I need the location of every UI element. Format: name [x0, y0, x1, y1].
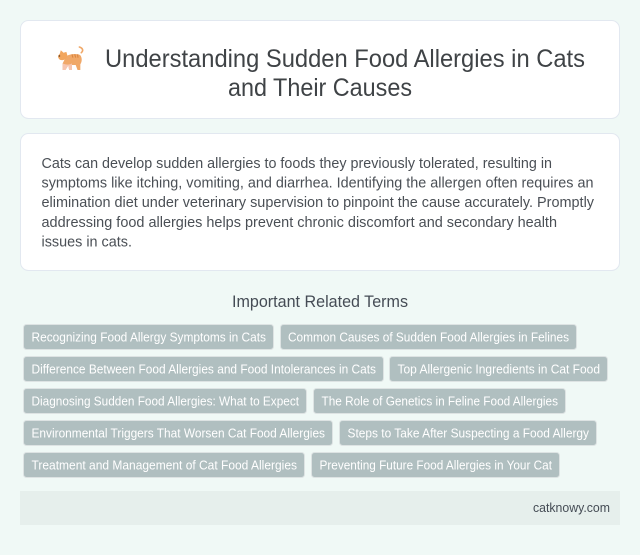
title text: and Their Causes [228, 74, 412, 102]
tag: next steps: Steps to Take After Suspecting a Food Allergy [348, 426, 590, 440]
tag: common causes [280, 324, 576, 350]
description text [42, 155, 594, 250]
heading: important related terms: Important Related Terms [232, 293, 408, 311]
tag: top ingredients [390, 356, 608, 382]
tag: next steps [340, 420, 596, 446]
description text: issues in cats. [42, 234, 132, 250]
panel: related term tags [24, 324, 608, 478]
tag: prevention [312, 452, 560, 478]
description text: Cats can develop sudden allergies to foods they previously tolerated, resulting in [42, 155, 552, 172]
description text: symptoms like itching, vomiting, and diarrhea. Identifying the allergen often requires an [42, 174, 594, 192]
title text: Understanding Sudden Food Allergies in Cats [105, 45, 585, 73]
tag: prevention: Preventing Future Food Allergies in Your Cat [320, 458, 552, 472]
tag: diagnosing [24, 388, 306, 414]
tag: genetics [314, 388, 566, 414]
tag: recognizing symptoms [24, 324, 274, 350]
title text [105, 45, 585, 102]
tag: treatment [24, 452, 304, 478]
tag: genetics: The Role of Genetics in Feline Food Allergies [322, 394, 558, 408]
description text: elimination diet under veterinary supervision to pinpoint the cause accurately. Promptly [42, 194, 594, 211]
tag: allergies vs intolerances: Difference Between Food Allergies and Food Intolerances in Cats [32, 362, 376, 376]
tag: environmental triggers [24, 420, 332, 446]
icon: cat [58, 47, 83, 70]
panel: title card [20, 20, 620, 118]
tag: recognizing symptoms: Recognizing Food Allergy Symptoms in Cats [32, 330, 266, 344]
footer [20, 491, 620, 525]
tag: treatment: Treatment and Management of Cat Food Allergies [32, 458, 297, 472]
footer: catknowy.com [533, 500, 610, 515]
tag: environmental triggers: Environmental Triggers That Worsen Cat Food Allergies [32, 426, 325, 440]
tag: diagnosing: Diagnosing Sudden Food Allergies: What to Expect [32, 394, 299, 408]
tag: top ingredients: Top Allergenic Ingredients in Cat Food [398, 362, 600, 376]
tag: allergies vs intolerances [24, 356, 384, 382]
panel: description card [20, 134, 620, 270]
tag: common causes: Common Causes of Sudden Food Allergies in Felines [288, 330, 569, 344]
description text: addressing food allergies helps prevent chronic discomfort and secondary health [42, 214, 557, 231]
